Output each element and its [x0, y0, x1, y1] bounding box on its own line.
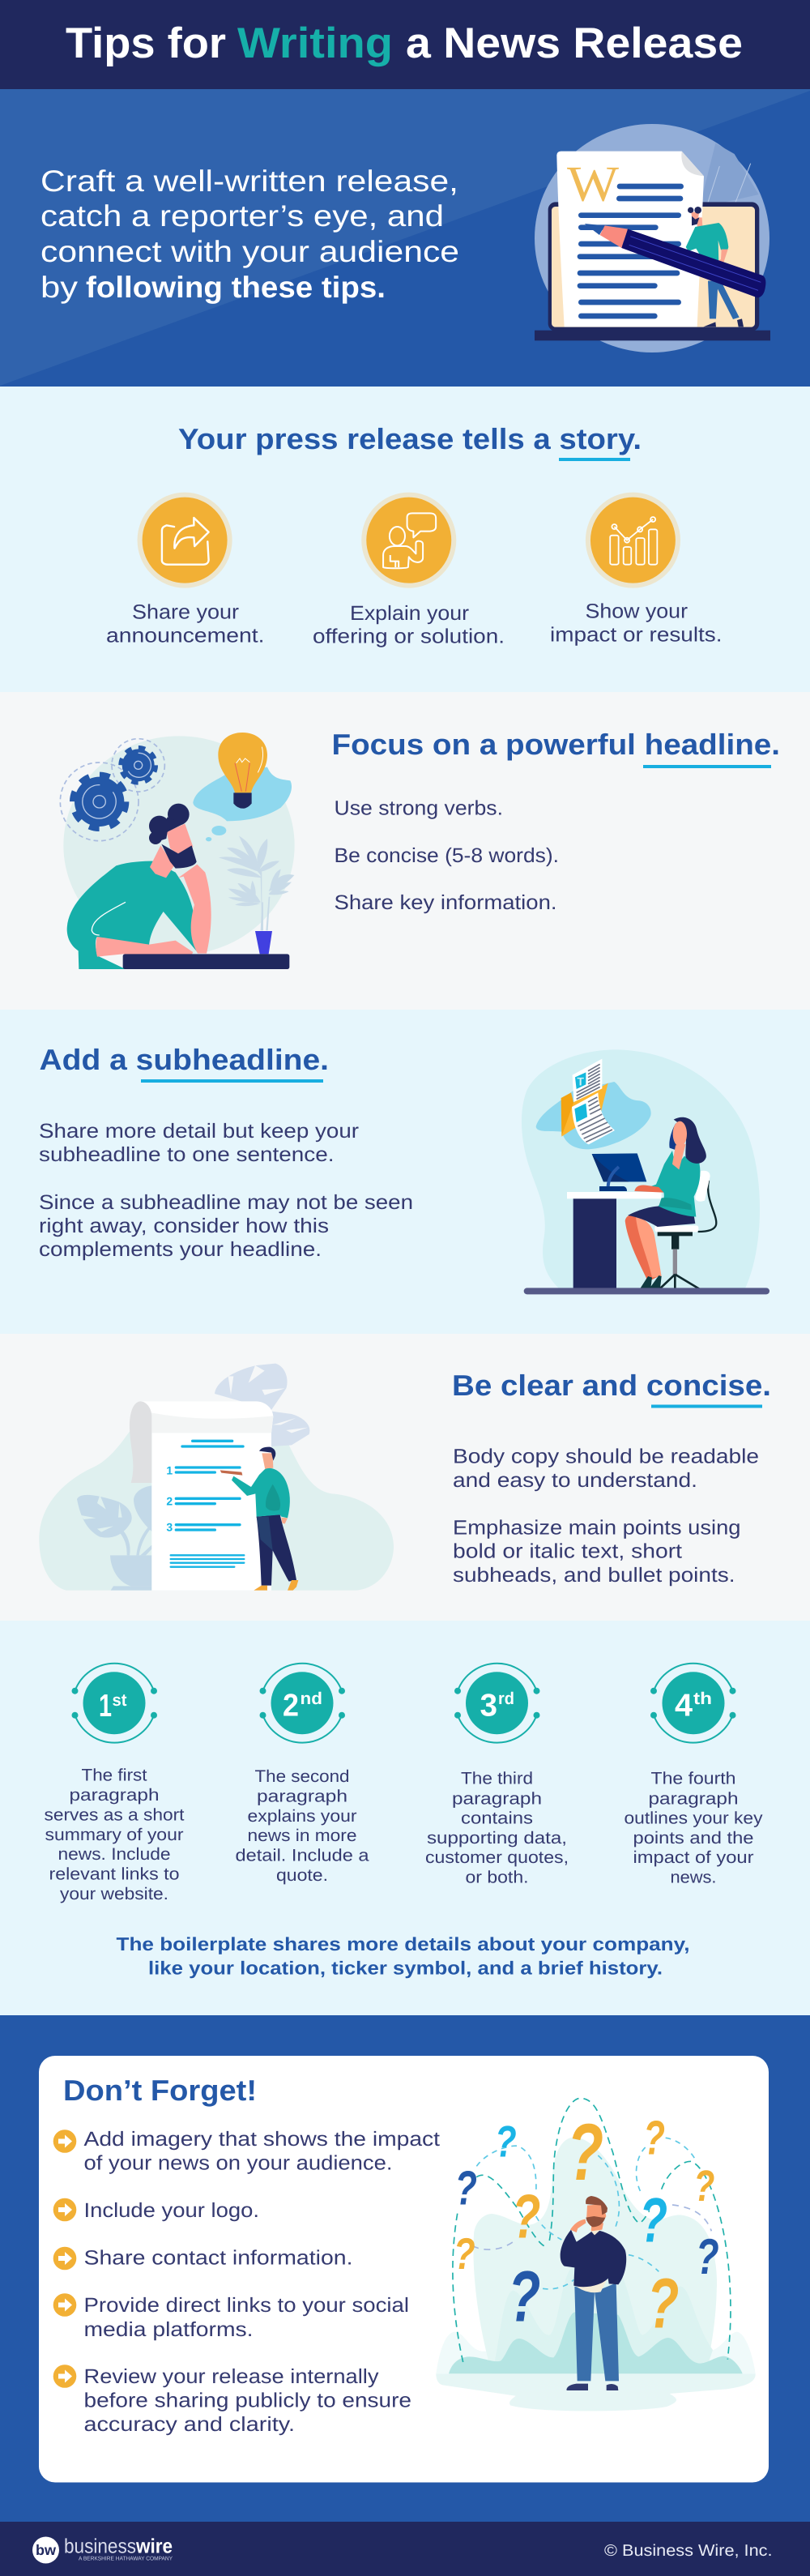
text: third paragraph: The third	[461, 1770, 533, 1788]
copyright: © Business Wire, Inc.	[604, 2542, 773, 2560]
text: headline tips: Be concise (5-8 words).	[334, 844, 559, 867]
question marks: ?	[647, 2264, 679, 2343]
illustration: man writing on scroll	[39, 1364, 394, 1591]
text: body copy advice: bold or italic text, short	[453, 1540, 682, 1562]
logo: businesswire: business	[64, 2535, 136, 2557]
badge: 3rd: 3	[480, 1688, 497, 1723]
bullet: social links: media platforms.	[84, 2318, 253, 2341]
bullet: add imagery: of your news on your audience.	[84, 2152, 392, 2175]
panel: don't forget	[0, 2015, 810, 2522]
question marks: ?	[495, 2117, 517, 2166]
text: second paragraph: The second	[254, 1767, 350, 1786]
text: body copy advice: Body copy should be readable	[453, 1446, 759, 1468]
text: subheadline advice: complements your headline.	[39, 1238, 322, 1261]
text: boilerplate note: like your location, ticker symbol, and a brief history.	[148, 1958, 663, 1979]
text: subheadline advice: Share more detail but keep your	[39, 1120, 359, 1143]
illustration: document on laptop with pencil	[535, 124, 770, 352]
badge: 2nd: nd	[300, 1690, 322, 1708]
bullet: social links: Provide direct links to your social	[84, 2294, 409, 2317]
text: body copy advice: Emphasize main points using	[453, 1517, 740, 1540]
text: third paragraph: contains	[461, 1809, 533, 1828]
icon: share announcement	[138, 493, 232, 588]
text: first paragraph: your website.	[60, 1885, 168, 1903]
badge: 2nd: 2	[283, 1688, 299, 1723]
text: second paragraph: detail. Include a	[235, 1846, 369, 1865]
question marks: ?	[696, 2228, 719, 2284]
question marks: ?	[455, 2161, 477, 2215]
text: third paragraph: paragraph	[452, 1789, 542, 1809]
illustration: woman at desk with documents: T	[577, 1075, 584, 1087]
illustration: man thinking with gears and bulb	[60, 733, 295, 969]
text: fourth paragraph	[624, 1770, 763, 1886]
text: subheadline advice: right away, consider how this	[39, 1215, 329, 1237]
hero text block: by	[40, 271, 79, 304]
text: body copy advice: and easy to understand.	[453, 1469, 697, 1492]
illustration: man writing on scroll: 2	[166, 1495, 173, 1508]
title banner: Writing	[237, 19, 393, 67]
badge: 4th	[650, 1664, 735, 1743]
text: second paragraph: quote.	[276, 1866, 328, 1885]
hero text block: following these tips.	[86, 271, 386, 304]
text: subheadline advice	[39, 1120, 413, 1261]
text: third paragraph: customer quotes,	[425, 1848, 569, 1867]
question marks	[454, 2107, 719, 2343]
footer	[0, 2522, 810, 2576]
white card	[39, 2056, 769, 2483]
bullet: review release: before sharing publicly to ensure	[84, 2389, 411, 2412]
bullet: review release: Review your release internally	[84, 2365, 379, 2388]
illustration: man with question marks	[436, 2098, 756, 2411]
text: first paragraph: paragraph	[70, 1786, 159, 1805]
bullet: include logo: Include your logo.	[84, 2199, 259, 2222]
hero text block: connect with your audience	[40, 235, 459, 268]
text: show your impact: impact or results.	[550, 624, 723, 647]
bullet: review release: accuracy and clarity.	[84, 2413, 295, 2436]
heading: headline: Focus on a powerful headline.	[332, 728, 780, 761]
text: second paragraph: news in more	[248, 1826, 356, 1845]
text: third paragraph	[425, 1770, 569, 1886]
title banner: Tips for	[66, 19, 226, 67]
text: fourth paragraph: The fourth	[651, 1770, 735, 1788]
badge: 3rd: rd	[498, 1690, 514, 1708]
bullet: add imagery: Add imagery that shows the impact	[84, 2128, 440, 2151]
text: explain your offering: Explain your	[350, 602, 469, 625]
question marks: ?	[639, 2185, 667, 2255]
title banner: a News Release	[406, 19, 743, 67]
panel: focus on a powerful headline	[0, 692, 810, 1010]
bullet: add imagery	[53, 2128, 440, 2175]
illustration: woman at desk with documents	[522, 1049, 770, 1294]
illustration: man writing on scroll: 3	[166, 1521, 173, 1534]
text: fourth paragraph: paragraph	[648, 1789, 739, 1809]
text: fourth paragraph: outlines your key	[624, 1809, 763, 1828]
text: second paragraph: paragraph	[257, 1788, 347, 1805]
text: first paragraph: summary of your	[45, 1826, 184, 1844]
text: headline tips: Use strong verbs.	[334, 797, 503, 820]
badge: 1st: st	[112, 1691, 126, 1710]
text: second paragraph	[235, 1767, 369, 1885]
badge: 4th: th	[693, 1690, 712, 1708]
panel: be clear and concise	[0, 1334, 810, 1621]
text: explain your offering	[313, 602, 505, 648]
panel: hero introduction	[0, 89, 810, 387]
hero text block: Craft a well-written release,	[40, 164, 458, 198]
question marks: ?	[512, 2181, 540, 2251]
text: body copy advice: subheads, and bullet points.	[453, 1564, 735, 1587]
badge: 2nd	[259, 1664, 345, 1743]
text: second paragraph: explains your	[248, 1807, 357, 1826]
question marks: ?	[643, 2111, 665, 2164]
question marks: ?	[567, 2107, 603, 2197]
text: third paragraph: or both.	[465, 1869, 528, 1886]
text: subheadline advice: subheadline to one sentence.	[39, 1143, 334, 1166]
question marks: ?	[693, 2161, 714, 2211]
text: first paragraph	[44, 1766, 185, 1903]
text: body copy advice	[453, 1446, 759, 1587]
text: show your impact: Show your	[585, 600, 688, 622]
logo: businesswire: bw	[36, 2542, 57, 2558]
text: headline tips: Share key information.	[334, 891, 557, 914]
heading: story: Your press release tells a story.	[178, 422, 642, 455]
text: first paragraph: news. Include	[58, 1845, 170, 1864]
text: share your announcement	[106, 601, 264, 647]
panel: add a subheadline	[0, 1010, 810, 1334]
text: boilerplate note	[117, 1933, 690, 1979]
badge: 3rd	[454, 1664, 539, 1743]
heading: don't forget: Don’t Forget!	[63, 2074, 257, 2107]
bullet: social links	[53, 2293, 409, 2341]
standing man	[561, 2196, 626, 2390]
title banner	[0, 0, 810, 89]
heading: concise: Be clear and concise.	[452, 1369, 771, 1402]
text: first paragraph: relevant links to	[49, 1865, 180, 1883]
heading: subheadline: Add a subheadline.	[39, 1043, 329, 1076]
text: boilerplate note: The boilerplate shares more details about your company,	[117, 1933, 690, 1954]
text: subheadline advice: Since a subheadline may not be seen	[39, 1191, 413, 1214]
icon: explain offering	[361, 493, 456, 588]
badge: 1st	[71, 1664, 157, 1743]
text: share your announcement: Share your	[132, 601, 239, 624]
question marks: ?	[454, 2229, 475, 2279]
badge: 4th: 4	[675, 1688, 693, 1723]
text: fourth paragraph: news.	[671, 1869, 716, 1886]
icon: impact chart	[586, 493, 680, 588]
hero text block	[40, 164, 459, 304]
hero text block: catch a reporter’s eye, and	[40, 199, 444, 233]
logo: businesswire: wire	[135, 2535, 173, 2557]
illustration: man writing on scroll: 1	[166, 1464, 173, 1477]
text: first paragraph: The first	[81, 1766, 147, 1784]
logo: businesswire: A BERKSHIRE HATHAWAY COMPANY	[79, 2556, 173, 2562]
badge: 1st: 1	[99, 1689, 112, 1724]
question marks: ?	[508, 2256, 540, 2336]
bullet: review release	[53, 2365, 411, 2436]
illustration: document on laptop with pencil: W	[567, 156, 619, 211]
panel: paragraph order	[0, 1621, 810, 2016]
text: explain your offering: offering or solution.	[313, 626, 505, 648]
text: show your impact	[550, 600, 723, 647]
text: headline tips	[334, 797, 559, 914]
text: fourth paragraph: impact of your	[633, 1848, 754, 1867]
text: share your announcement: announcement.	[106, 624, 264, 647]
text: fourth paragraph: points and the	[633, 1829, 753, 1848]
logo: businesswire	[32, 2535, 173, 2564]
panel: your press release tells a story	[0, 387, 810, 692]
bullet: contact information: Share contact information.	[84, 2246, 353, 2269]
text: first paragraph: serves as a short	[44, 1805, 185, 1825]
text: third paragraph: supporting data,	[427, 1829, 567, 1848]
